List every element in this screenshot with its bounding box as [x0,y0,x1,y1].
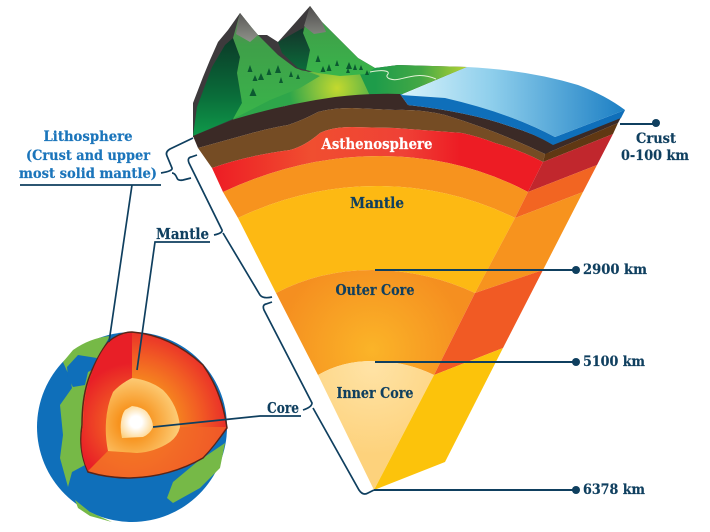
leader lines and brackets [20,124,656,494]
wedge right side face [374,110,625,490]
continents [60,336,225,522]
label: Asthenosphere: Asthenosphere [321,135,432,153]
label: 2900 km: 2900 km [583,262,647,278]
core leader [153,416,301,427]
right mountain shaded slope [278,28,310,70]
globe cutaway [37,332,227,522]
label: 5100 km: 5100 km [583,354,645,370]
label: Crust depth [621,131,689,164]
layer: asthenosphere [212,127,543,192]
label: Lithosphere: most solid mantle) [19,166,157,182]
layer: mantle yellow [238,186,515,293]
depth lines [374,124,656,490]
layer: brown upper mantle [198,108,545,168]
mantle left face [81,333,132,471]
ocean [400,67,625,145]
mountain landscape [193,6,467,137]
ocean blue edge [400,94,625,145]
ocean surface [401,67,625,137]
label: Lithosphere: Lithosphere [44,129,133,145]
wedge front face layers [193,94,552,490]
label: Mantle in wedge: Mantle [350,194,404,212]
left mountain face [233,13,320,119]
label: Lithosphere: (Crust and upper [26,148,151,164]
rock silhouette [193,6,467,137]
bracket: mantle [188,155,272,298]
label: Lithosphere [19,129,157,182]
layer: inner core [318,361,434,490]
layer: crust dark band [193,94,552,154]
lithosphere leader [20,185,161,342]
bracket: lithosphere [161,138,193,180]
depth marker dots [572,119,660,494]
rocky peaks [236,6,326,42]
mantle lower face [89,427,226,477]
layer: upper mantle orange [223,156,528,218]
mantle cut [81,332,227,478]
label: Crust depth: 0-100 km [621,148,689,164]
plain [233,55,400,120]
label: Inner Core: Inner Core [336,384,414,402]
globe ocean [37,332,227,522]
label: Core: Core [267,399,299,417]
right mountain face [303,6,375,76]
bracket: core [263,302,374,494]
outer core shell [106,378,180,453]
label: Mantle: Mantle [156,225,209,243]
left shaded slope [193,38,242,136]
icon: trees [248,55,369,96]
label: 6378 km: 6378 km [583,482,645,498]
layer: outer core [276,270,475,375]
inner core [121,406,153,438]
label: Outer Core: Outer Core [336,281,414,299]
river [370,71,436,80]
label: Crust depth: Crust [636,131,676,147]
inland sea [67,355,97,387]
mantle leader [137,242,210,370]
